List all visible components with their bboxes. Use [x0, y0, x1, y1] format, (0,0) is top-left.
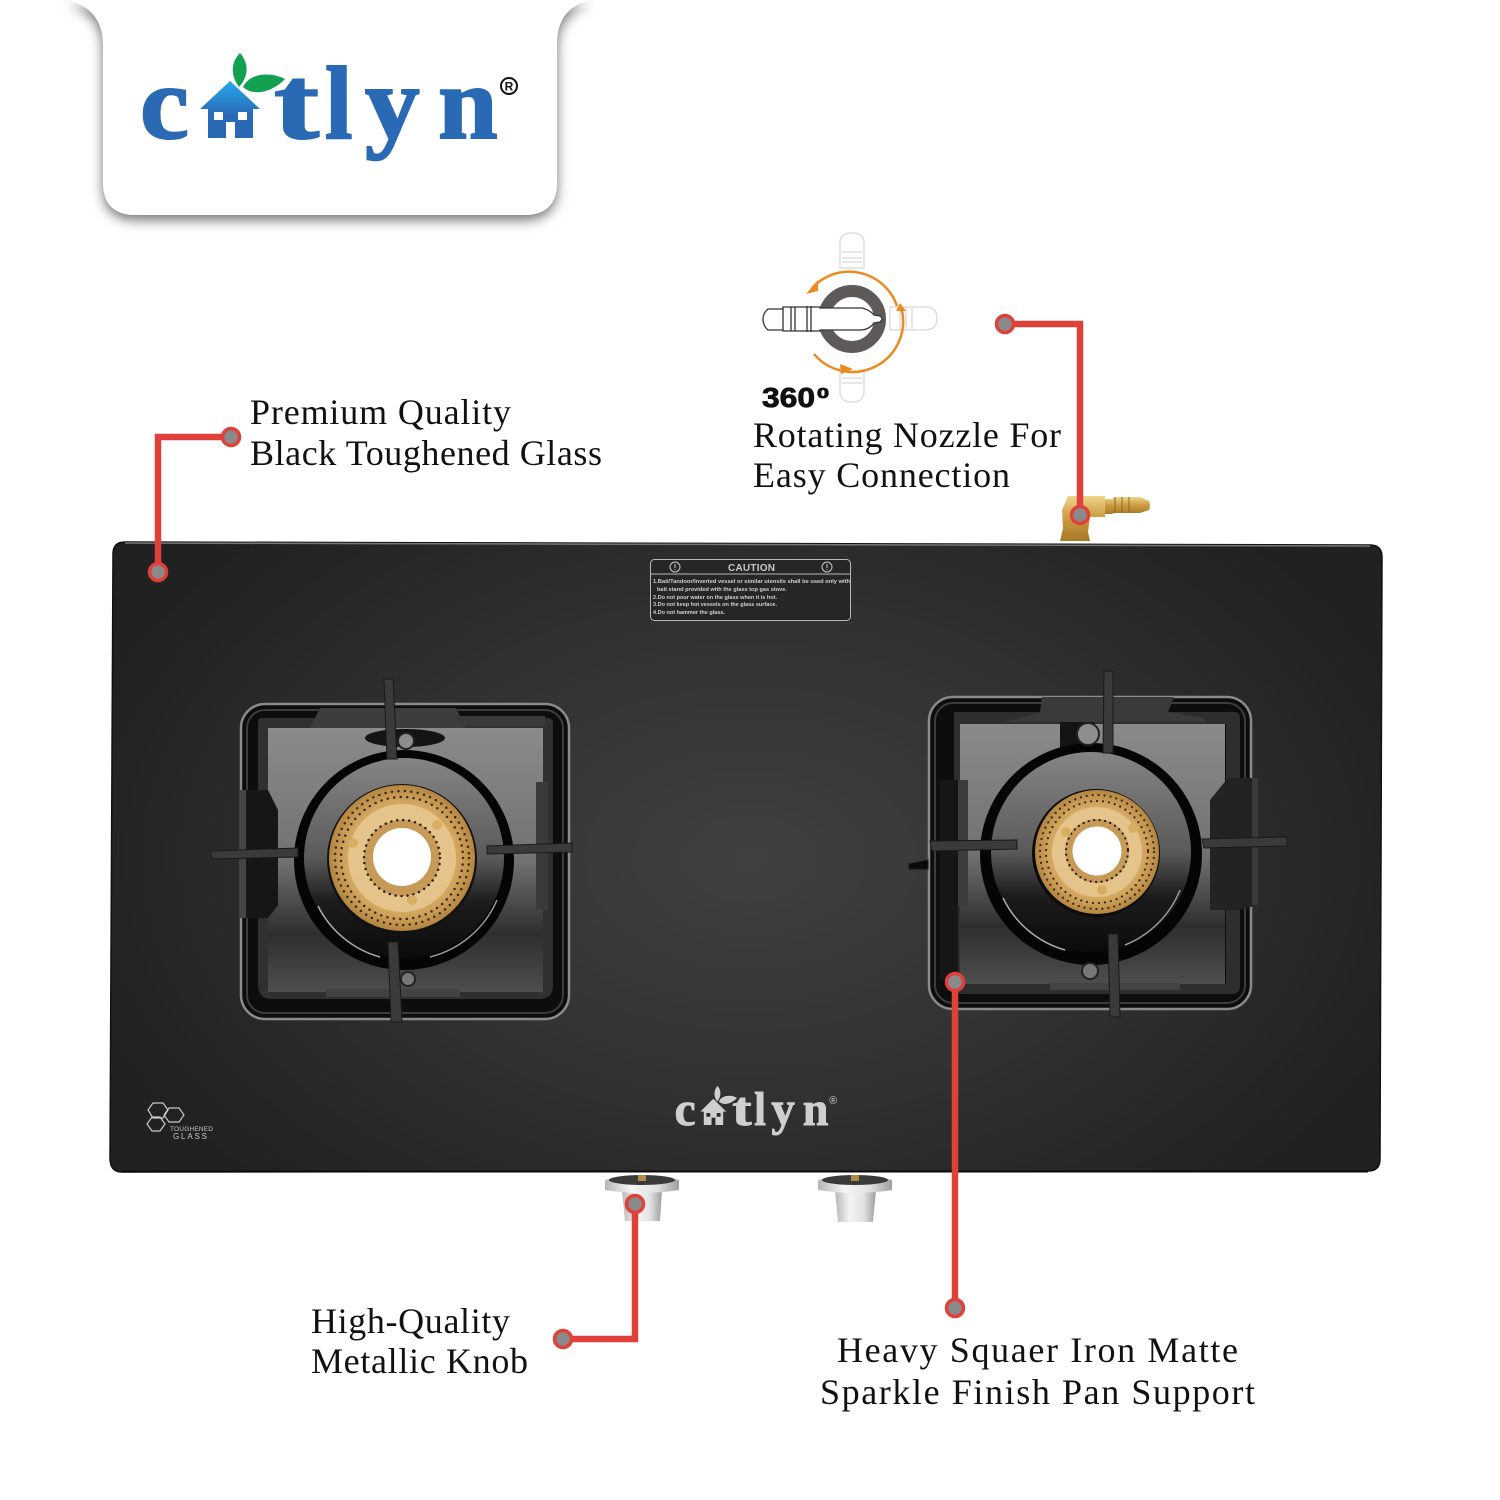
toughened glass badge — [147, 1103, 213, 1141]
callout: rotating nozzle heading: 0 — [817, 385, 829, 402]
registered mark: R — [505, 80, 514, 94]
ghost nozzle positions — [840, 233, 937, 402]
brand logo: n — [438, 45, 498, 161]
callout line: nozzle — [996, 316, 1088, 524]
knob: right — [818, 1175, 892, 1222]
caution label — [650, 560, 850, 620]
pan support arms — [210, 679, 572, 1022]
knob: left — [605, 1175, 679, 1221]
text: toughened glass: Black Toughened Glass — [250, 433, 602, 473]
toughened glass badge: GLASS — [173, 1132, 207, 1141]
registered mark — [501, 78, 517, 94]
text: pan support: Sparkle Finish Pan Support — [820, 1372, 1255, 1412]
text: pan support — [820, 1330, 1255, 1412]
caution label: 2.Do not pour water on the glass when it is hot. — [653, 595, 778, 601]
burner bowl — [294, 750, 514, 970]
brand logo: y — [365, 46, 420, 161]
stove brand logo: ® — [829, 1095, 837, 1107]
burner bowl — [980, 743, 1202, 965]
orange rotation arrows — [812, 272, 903, 372]
tray floor — [960, 724, 1225, 984]
brass burner cap — [1032, 789, 1160, 917]
nozzle body — [763, 307, 882, 331]
stove brand logo: l — [754, 1083, 766, 1136]
brand logo: l — [325, 46, 352, 161]
brand logo: c — [140, 47, 189, 161]
rotation ring — [824, 291, 880, 347]
stove glass top — [110, 542, 1382, 1172]
chrome tray rim — [241, 704, 569, 1019]
callout line: toughened glass — [150, 428, 240, 580]
pan support arms — [909, 671, 1287, 1017]
caution label: 3.Do not keep hot vessels on the glass surface. — [653, 602, 777, 608]
callout line: knob — [554, 1196, 644, 1348]
text: rotating nozzle: Easy Connection — [753, 455, 1010, 495]
text: knob: Metallic Knob — [311, 1341, 528, 1381]
caution label: 4.Do not hammer the glass. — [653, 610, 726, 616]
icon: house with leaves — [200, 53, 285, 138]
text: knob: High-Quality — [311, 1301, 510, 1341]
brass gas inlet nozzle — [1060, 496, 1150, 541]
callout: rotating nozzle heading: 360 — [762, 382, 815, 413]
chrome tray rim — [929, 697, 1251, 1009]
callout: rotating nozzle heading — [762, 382, 829, 413]
icon: rotating nozzle — [763, 233, 937, 402]
stove brand logo: c — [675, 1084, 696, 1136]
stove brand logo: y — [771, 1084, 795, 1136]
stove brand logo — [675, 1083, 837, 1136]
callout line: pan support — [946, 974, 964, 1316]
logo card — [68, 0, 590, 215]
brand logo — [140, 45, 517, 161]
text: toughened glass — [250, 392, 602, 473]
stove brand logo: n — [803, 1083, 828, 1136]
burner: right — [909, 671, 1287, 1017]
toughened glass badge: TOUGHENED — [170, 1126, 213, 1133]
text: pan support: Heavy Squaer Iron Matte — [837, 1330, 1238, 1370]
brass burner cap — [327, 784, 477, 934]
pan support frame — [258, 718, 553, 999]
screws — [1077, 723, 1099, 745]
text: knob — [311, 1301, 528, 1381]
caution label: CAUTION — [728, 563, 775, 574]
caution label: bati stand provided with the glass top gas stove. — [657, 587, 788, 593]
text: toughened glass: Premium Quality — [250, 392, 511, 432]
burner: left — [210, 679, 572, 1022]
screws — [398, 733, 414, 749]
brand logo: t — [274, 47, 319, 161]
stove brand logo: t — [732, 1083, 752, 1136]
caution label: 1.Bati/Tandoor/Inverted vessel or similar utensils shall be used only with — [653, 579, 850, 585]
text: rotating nozzle: Rotating Nozzle For — [753, 415, 1061, 455]
text: rotating nozzle — [753, 415, 1061, 495]
tray floor — [268, 728, 543, 992]
pan support frame — [954, 712, 1240, 994]
